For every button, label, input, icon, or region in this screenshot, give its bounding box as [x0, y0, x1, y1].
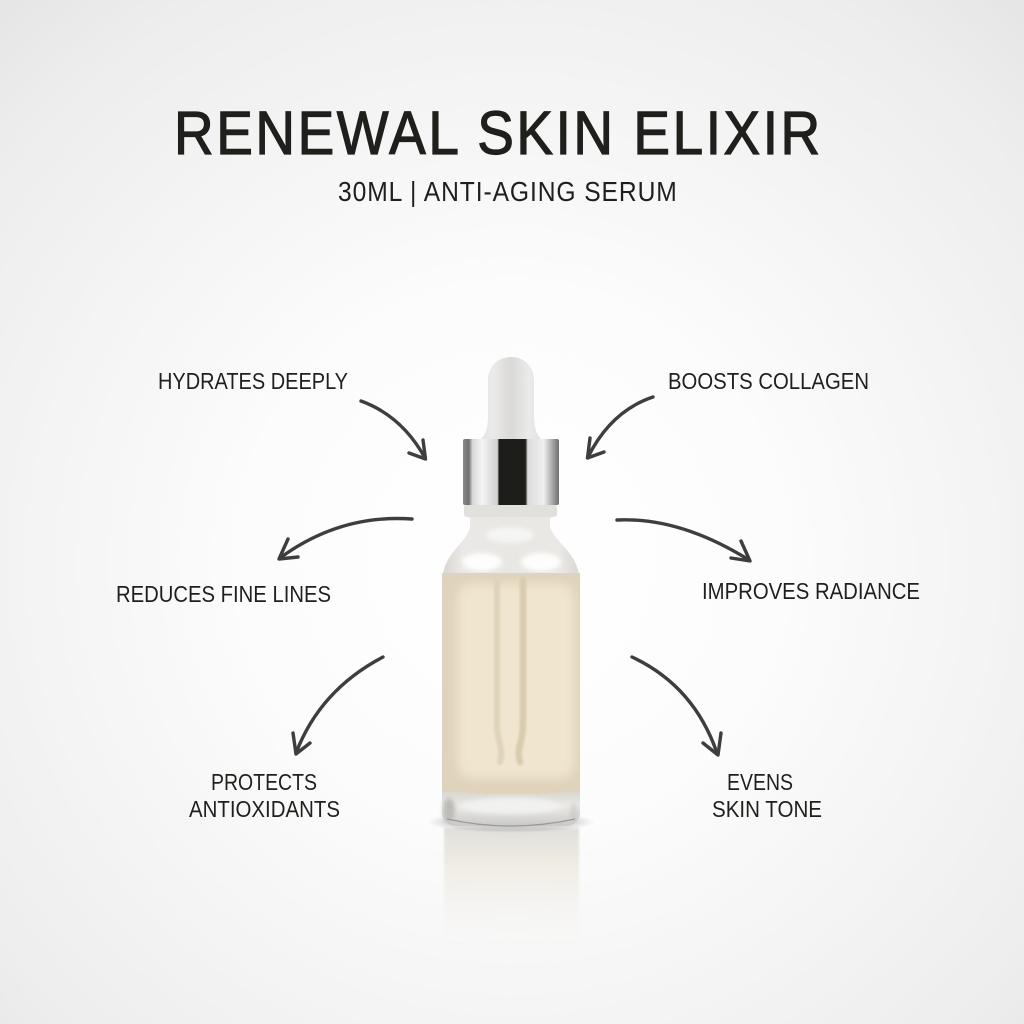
base corner shading — [443, 798, 578, 822]
label: evens skin tone — [712, 769, 822, 822]
label: protects antioxidants: PROTECTS — [211, 769, 317, 795]
glass bottle body — [442, 505, 580, 826]
dropper tube in liquid — [497, 580, 523, 762]
base edge — [447, 819, 575, 826]
dropper bulb — [481, 357, 541, 439]
serum liquid — [442, 573, 580, 795]
thick glass base — [442, 790, 580, 826]
base highlight — [461, 798, 561, 814]
arrow: protects antioxidants — [293, 657, 383, 754]
label: protects antioxidants: ANTIOXIDANTS — [189, 796, 340, 822]
label: hydrates deeply: HYDRATES DEEPLY — [158, 368, 348, 394]
label: protects antioxidants — [189, 769, 340, 822]
label: reduces fine lines: REDUCES FINE LINES — [116, 581, 331, 607]
label: evens skin tone: SKIN TONE — [712, 796, 822, 822]
label: evens skin tone: EVENS — [727, 769, 793, 795]
arrow: hydrates deeply — [361, 401, 426, 459]
label: boosts collagen: BOOSTS COLLAGEN — [668, 368, 869, 394]
neck ring — [464, 505, 557, 517]
label: improves radiance: IMPROVES RADIANCE — [702, 578, 920, 604]
glass highlights — [462, 527, 561, 571]
bottle shadow — [427, 811, 595, 833]
arrow: evens skin tone — [632, 657, 721, 755]
arrow: reduces fine lines — [279, 518, 412, 559]
metal collar — [463, 439, 559, 505]
title: RENEWAL SKIN ELIXIR — [174, 99, 820, 168]
bottle reflection — [444, 828, 579, 948]
arrow: boosts collagen — [588, 397, 653, 458]
arrow: improves radiance — [617, 520, 750, 561]
serum bottle — [442, 357, 580, 826]
subtitle: 30ML | ANTI-AGING SERUM — [338, 176, 677, 207]
